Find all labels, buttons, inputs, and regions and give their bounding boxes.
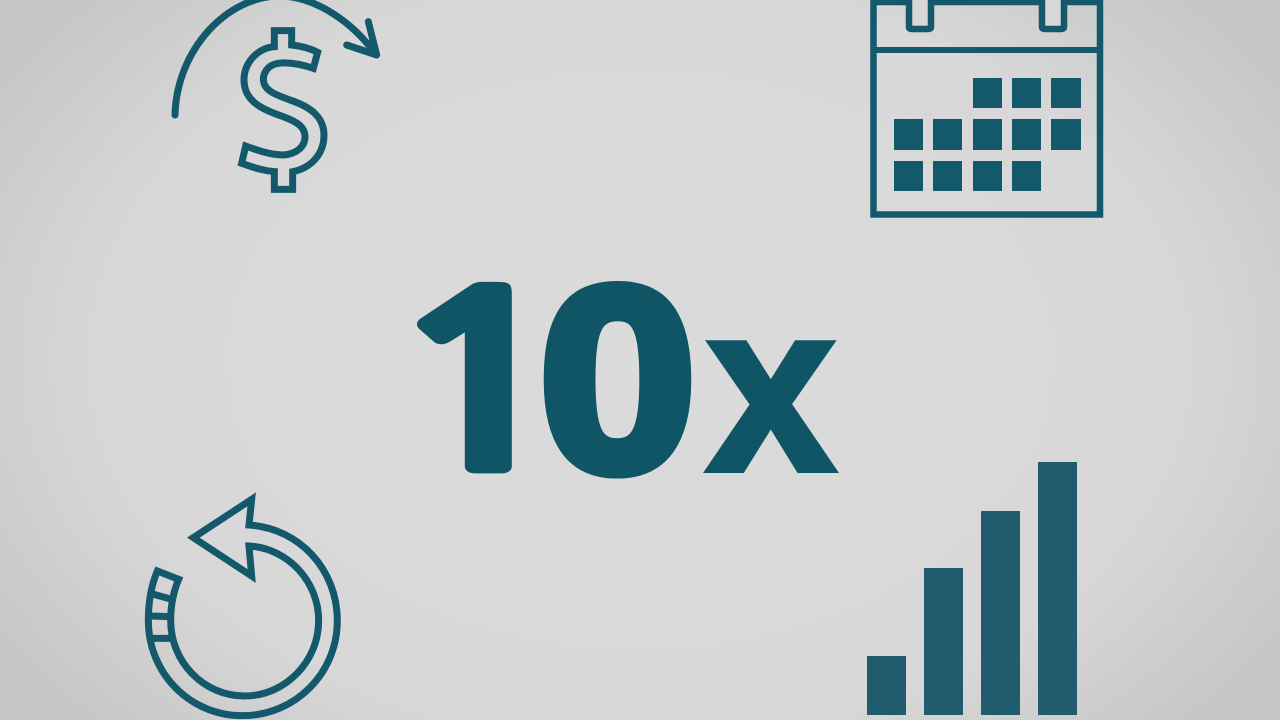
headline: 10x: 1 xyxy=(380,267,582,505)
icon: dollar sign with circular arrow xyxy=(175,0,377,189)
headline: 10x xyxy=(380,233,835,526)
headline: 10x: 0 xyxy=(539,233,696,526)
icon: circular refresh arrow xyxy=(148,499,337,716)
icon: calendar xyxy=(873,0,1101,214)
headline: 10x: x xyxy=(707,253,835,521)
bar chart: rising bars xyxy=(867,462,1077,715)
